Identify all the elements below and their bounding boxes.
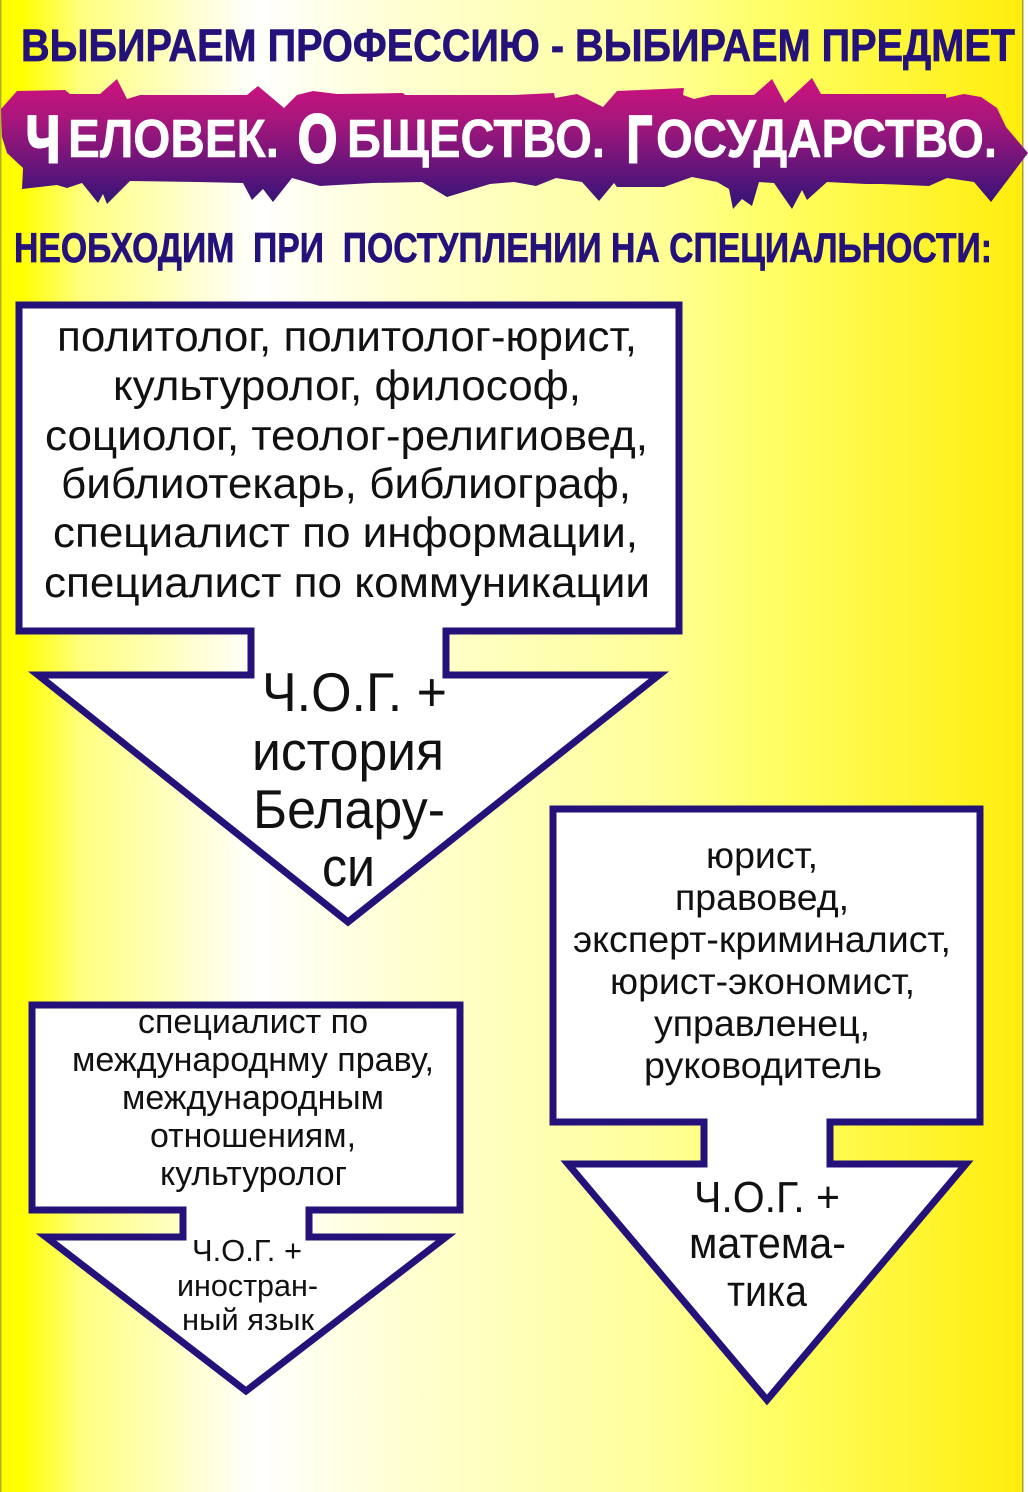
profession list: [44, 313, 650, 607]
subject combination: история: [252, 720, 444, 782]
profession list: эксперт-криминалист,: [573, 919, 951, 960]
arrow box outline: [32, 1005, 460, 1391]
subject combination: Ч.О.Г. +: [694, 1173, 840, 1222]
profession list: международным: [122, 1079, 384, 1117]
banner: subject title: [1, 78, 1028, 209]
profession list: юрист-экономист,: [610, 961, 915, 1002]
banner title text: БЩЕСТВО.: [347, 109, 605, 169]
subject combination: Ч.О.Г. +: [192, 1233, 302, 1268]
profession list: юрист,: [706, 835, 818, 876]
panel: politologist and related professions: [19, 305, 679, 922]
profession list: правовед,: [675, 877, 849, 918]
subject combination: [689, 1173, 846, 1316]
banner shape: [1, 78, 1028, 209]
profession list: специалист по коммуникации: [44, 559, 650, 607]
subject combination: иностран-: [177, 1268, 318, 1303]
banner title text: [26, 101, 997, 177]
profession list: библиотекарь, библиограф,: [61, 460, 631, 508]
banner title text: О: [298, 101, 337, 177]
arrow box outline: [553, 809, 980, 1400]
subject combination: ный язык: [182, 1302, 314, 1337]
subject combination: си: [322, 836, 375, 898]
subject combination: [177, 1233, 318, 1337]
profession list: управленец,: [654, 1003, 870, 1044]
banner title text: Ч: [26, 102, 60, 176]
profession list: [573, 835, 951, 1086]
profession list: отношениям,: [150, 1117, 356, 1155]
banner title text: ЕЛОВЕК.: [68, 109, 279, 169]
subject combination: матема-: [689, 1219, 846, 1268]
subject combination: [252, 661, 447, 898]
profession list: политолог, политолог-юрист,: [57, 313, 637, 361]
profession list: [72, 1003, 434, 1193]
banner title text: Г: [627, 102, 652, 176]
subject combination: Ч.О.Г. +: [262, 661, 447, 723]
profession list: международнму праву,: [72, 1041, 434, 1079]
panel: international law professions: [32, 1003, 460, 1391]
profession list: специалист по информации,: [53, 509, 638, 557]
panel: lawyer and related professions: [553, 809, 980, 1400]
arrow box outline: [19, 305, 679, 922]
profession list: специалист по: [138, 1003, 368, 1041]
profession list: социолог, теолог-религиовед,: [45, 412, 648, 460]
profession list: культуролог: [160, 1155, 347, 1193]
profession list: руководитель: [644, 1045, 882, 1086]
profession list: культуролог, философ,: [113, 362, 581, 410]
subject combination: Белару-: [253, 778, 445, 840]
subject combination: тика: [727, 1267, 807, 1316]
